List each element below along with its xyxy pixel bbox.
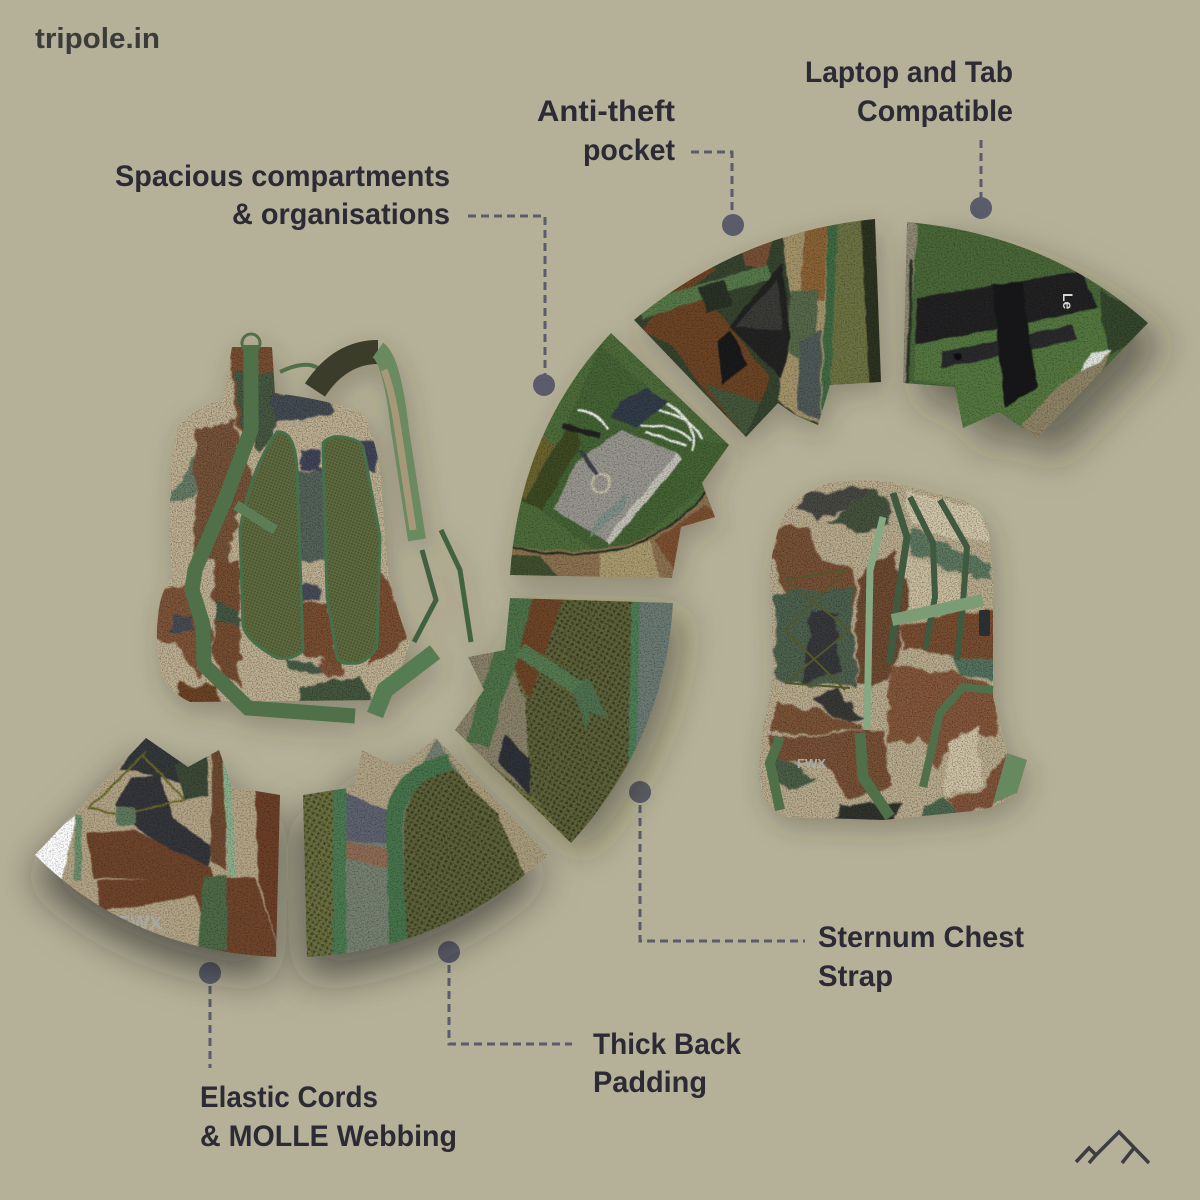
top ring — [242, 334, 260, 352]
backpack: front view — [745, 468, 1040, 833]
connector: elastic cords — [199, 962, 221, 1068]
chest strap — [640, 272, 770, 312]
dark camo — [119, 738, 182, 784]
mesh pad — [403, 768, 526, 939]
pocket zipper — [923, 687, 993, 787]
buckle — [572, 677, 608, 732]
brown panel — [640, 280, 770, 437]
body — [745, 468, 1040, 833]
power bank — [611, 388, 668, 428]
strap camo centre — [384, 370, 413, 530]
side buckle — [198, 875, 228, 950]
side strap — [770, 737, 780, 810]
phone — [942, 325, 1077, 368]
mesh panel — [830, 220, 877, 385]
trim — [74, 815, 82, 880]
label: thick back padding: Thick Back — [593, 1028, 741, 1061]
shoulder strap right lower — [378, 350, 417, 540]
tan patch — [144, 894, 202, 946]
light strip — [867, 517, 883, 730]
white corner — [35, 816, 76, 880]
body — [140, 330, 430, 720]
webbing edge — [826, 222, 833, 425]
cables — [578, 400, 702, 450]
laptop logo: Le — [1060, 293, 1076, 310]
shoulder strap right padded — [315, 352, 378, 390]
sternum strap — [520, 650, 585, 692]
camo hem — [512, 490, 714, 578]
black strap — [992, 282, 1037, 407]
cord — [90, 752, 185, 815]
loose strap end — [441, 530, 471, 642]
connector: laptop — [970, 140, 992, 219]
bottom straps — [860, 733, 890, 817]
wedge: anti-theft pocket — [620, 205, 895, 450]
label: anti-theft pocket: Anti-theft — [537, 95, 675, 128]
connector: anti-theft — [691, 152, 744, 236]
lower webbing — [414, 550, 436, 642]
label: thick back padding: Padding — [593, 1066, 707, 1099]
sternum strap — [236, 505, 275, 530]
connector: sternum — [629, 781, 805, 941]
label: thick back padding — [593, 1028, 741, 1099]
label: sternum chest strap — [818, 921, 1024, 993]
key ring — [592, 474, 610, 492]
elastic lacing — [785, 570, 850, 690]
wedge: compartments — [504, 333, 739, 600]
label: elastic cords and molle webbing: Elastic Cords — [200, 1081, 378, 1114]
mesh left — [303, 790, 334, 957]
icon: mountain logo — [1076, 1132, 1149, 1163]
camo under strap — [514, 598, 562, 699]
label: elastic cords and molle webbing: & MOLLE Webbing — [200, 1120, 457, 1153]
label: anti-theft pocket: pocket — [583, 134, 675, 167]
backpack: rear view — [140, 330, 471, 720]
label: anti-theft pocket — [537, 95, 675, 167]
compression strap — [892, 600, 983, 620]
laptop — [915, 271, 1098, 345]
side fabric — [635, 602, 673, 748]
shoulder strap left — [192, 345, 355, 716]
wallet — [729, 263, 790, 378]
connector: compartments — [468, 216, 555, 396]
connector: back padding — [438, 941, 572, 1044]
card holder — [553, 430, 677, 540]
webbing stripes — [346, 738, 437, 810]
label: spacious compartments: & organisations — [232, 198, 450, 231]
wedge: back padding — [290, 725, 565, 970]
label: laptop and tab — [805, 56, 1013, 128]
camo strip — [778, 222, 828, 425]
pocket — [915, 308, 1110, 440]
label: spacious compartments — [115, 160, 450, 231]
bottom strap — [375, 652, 435, 715]
logo text: FWX — [118, 913, 163, 935]
tan tip — [436, 739, 548, 875]
side pocket band — [993, 753, 1027, 803]
shoulder strap — [478, 590, 522, 745]
padding right — [323, 437, 380, 663]
label: elastic cords and molle webbing — [200, 1081, 457, 1153]
logo text: FWX — [797, 756, 826, 771]
zipper pouch — [520, 423, 582, 510]
top handle — [280, 365, 318, 372]
camo corner — [1022, 350, 1112, 448]
pad edge — [394, 762, 450, 965]
label: sternum chest strap: Strap — [818, 960, 893, 993]
wedge: laptop — [890, 208, 1165, 453]
brand name: tripole.in — [35, 23, 160, 55]
label: laptop and tab: Compatible — [857, 95, 1013, 128]
brown panels — [87, 830, 215, 880]
usb port — [979, 610, 990, 636]
label: spacious compartments: Spacious compartments — [115, 160, 450, 193]
zippers — [890, 493, 907, 663]
padding left — [240, 432, 303, 658]
cord lock — [116, 806, 136, 826]
wedge: elastic cords — [20, 725, 295, 970]
label: sternum chest strap: Sternum Chest — [818, 921, 1024, 954]
buckle — [699, 279, 733, 313]
wedge: sternum strap — [440, 585, 690, 860]
label: laptop and tab: Laptop and Tab — [805, 56, 1013, 89]
